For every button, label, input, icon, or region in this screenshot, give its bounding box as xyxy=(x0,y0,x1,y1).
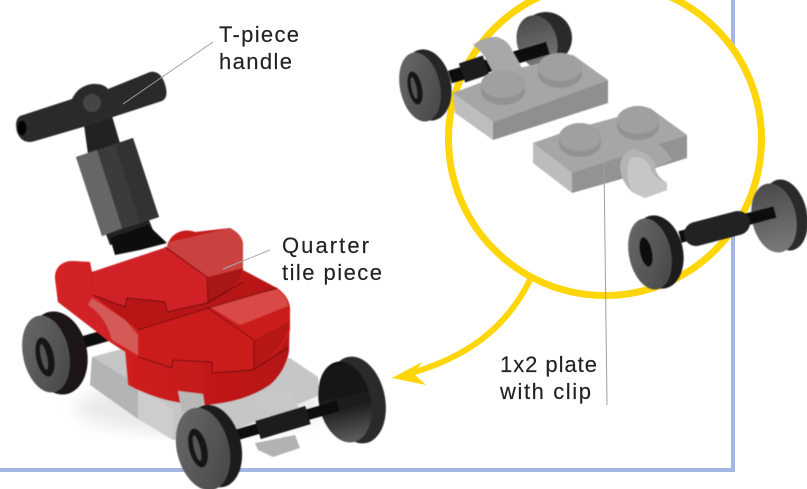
gray base plate xyxy=(90,348,320,440)
front axle xyxy=(236,406,338,435)
gray clip on base xyxy=(178,391,205,412)
yellow curved arrow xyxy=(392,280,530,385)
lawn mower model xyxy=(15,72,394,489)
exploded view: upper wheel axle and plate xyxy=(393,6,608,140)
leader line: plate with clip xyxy=(604,163,607,405)
label: 1x2 plate with clip xyxy=(499,352,597,404)
upper tile xyxy=(92,228,243,312)
rear left wheel axle xyxy=(80,333,115,343)
axle xyxy=(680,212,775,237)
ground shadow xyxy=(75,382,325,434)
front clip xyxy=(255,392,303,420)
connector xyxy=(462,65,486,73)
leader line: T-piece handle xyxy=(123,42,213,104)
red mower body xyxy=(55,228,290,405)
plate 1 xyxy=(453,53,608,140)
yellow detail circle xyxy=(448,0,762,296)
axle xyxy=(450,48,548,77)
front lower clip xyxy=(255,435,300,457)
connector xyxy=(696,223,738,234)
T-piece handle xyxy=(16,72,166,142)
exploded view: lower wheel axle xyxy=(622,175,807,294)
label: T-piece handle xyxy=(219,22,299,74)
clip xyxy=(620,142,672,198)
back wheel xyxy=(511,6,578,73)
lower tile xyxy=(138,288,290,373)
leader line: quarter tile xyxy=(223,250,270,269)
front wheel xyxy=(393,45,458,125)
label: Quarter tile piece: Quarter xyxy=(282,233,369,258)
far wheel xyxy=(745,175,807,257)
body silhouette xyxy=(55,228,290,405)
front left wheel xyxy=(168,399,250,489)
label: 1x2 plate with clip: with clip xyxy=(499,379,591,404)
rear left wheel xyxy=(15,306,95,400)
axle connector xyxy=(258,415,308,430)
front right wheel xyxy=(311,351,394,449)
middle ring xyxy=(93,282,277,330)
near wheel xyxy=(622,211,690,294)
label: Quarter tile piece xyxy=(282,233,382,285)
label: T-piece handle: T-piece xyxy=(219,22,299,47)
label: Quarter tile piece: tile piece xyxy=(282,260,382,285)
clip xyxy=(473,37,522,76)
handle column xyxy=(76,116,167,255)
exploded view: 1x2 plate with clip xyxy=(533,106,687,198)
left lobe xyxy=(55,261,138,357)
label: 1x2 plate with clip: 1x2 plate xyxy=(500,352,597,377)
label: T-piece handle: handle xyxy=(219,49,292,74)
